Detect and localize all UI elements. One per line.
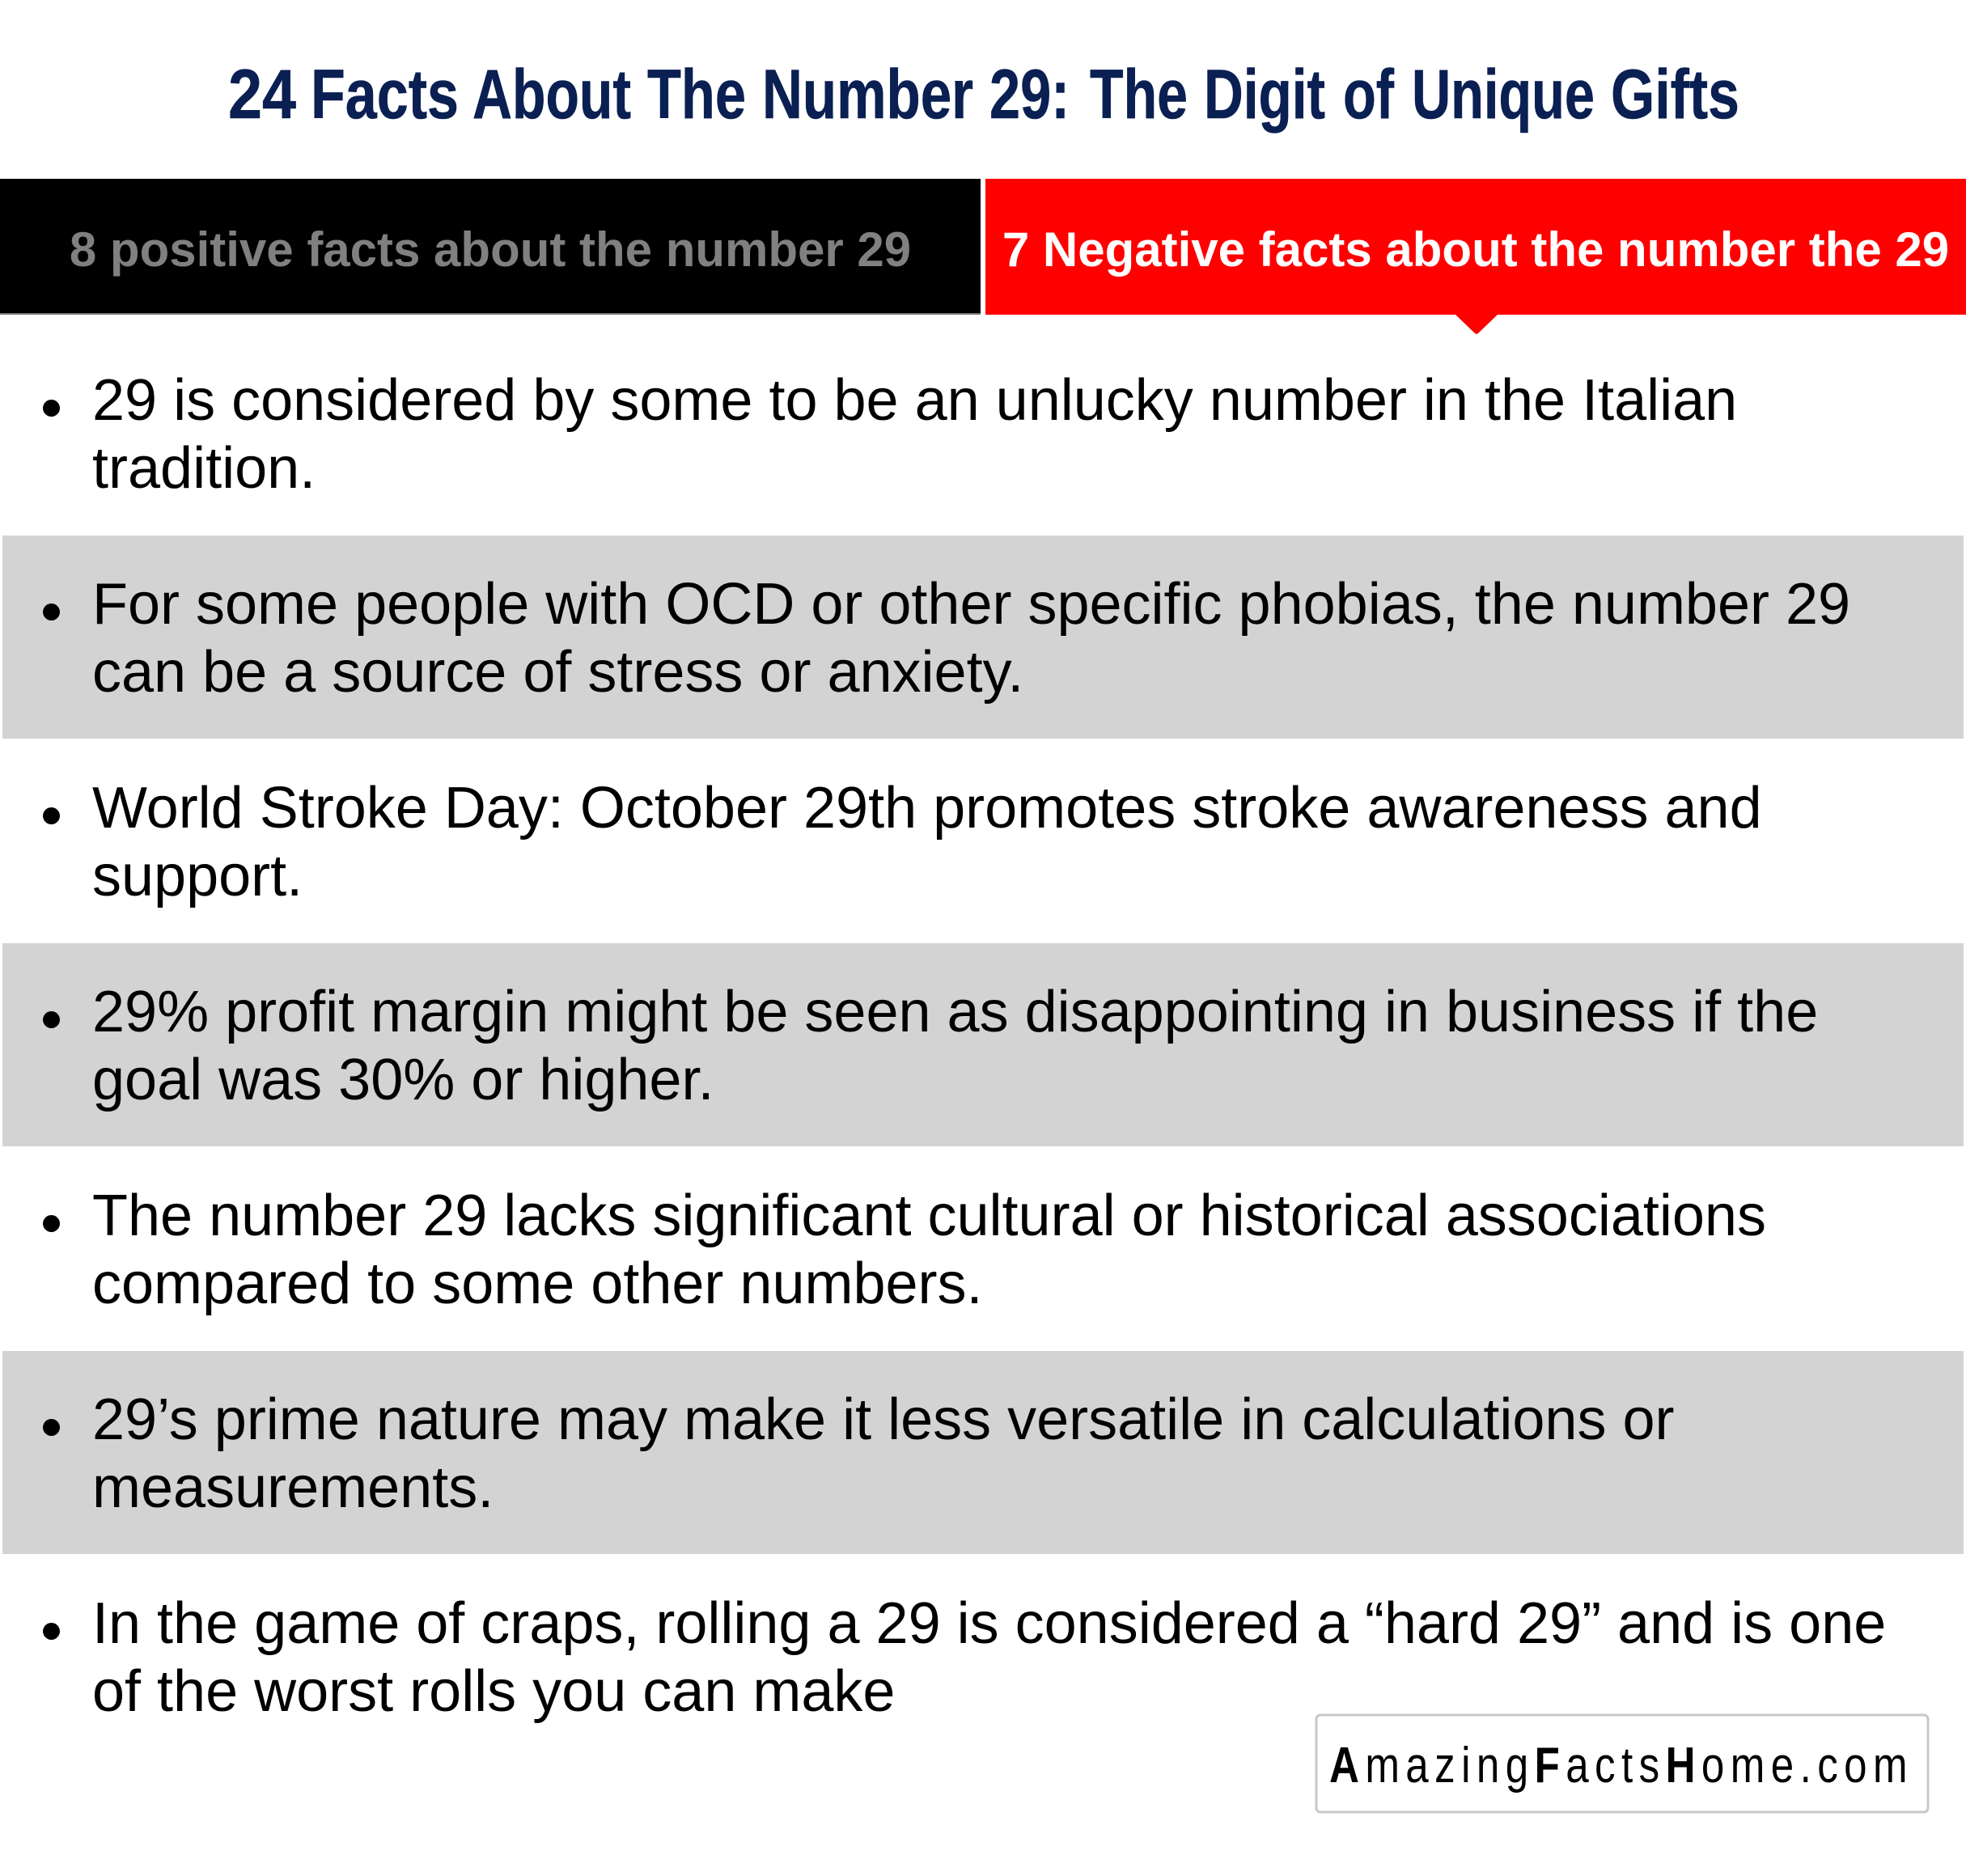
title: The (647, 56, 746, 133)
bullet (43, 400, 60, 417)
fact text: goal was 30% or higher. (92, 1048, 714, 1112)
fact row 1 (43, 368, 1737, 501)
fact row 4 (2, 943, 1964, 1146)
fact row 2 (2, 536, 1964, 739)
icon: active tab pointer (1455, 315, 1498, 334)
fact text: 29% profit margin might be seen as disappointing in business if the (92, 980, 1818, 1044)
title: Unique (1412, 56, 1595, 133)
bullet (43, 1011, 60, 1028)
tab label: positive: 8 positive facts about the number 29 (70, 222, 911, 277)
fact row 7 (43, 1591, 1886, 1724)
watermark badge (1316, 1713, 1929, 1814)
fact text (92, 572, 1850, 705)
fact text: World Stroke Day: October 29th promotes stroke awareness and (92, 776, 1762, 841)
title: of (1343, 56, 1394, 133)
fact text (92, 1387, 1675, 1520)
fact text: In the game of craps, rolling a 29 is considered a “hard 29” and is one (92, 1591, 1886, 1656)
title: 24 (228, 56, 296, 133)
title (228, 56, 1739, 133)
tab: negative facts (985, 179, 1966, 315)
bullet (43, 1419, 60, 1436)
fact text (92, 776, 1762, 908)
bullet (43, 1623, 60, 1640)
fact row 5 (43, 1184, 1766, 1316)
title: About (472, 56, 631, 133)
title: Gifts (1611, 56, 1739, 133)
fact text: can be a source of stress or anxiety. (92, 640, 1023, 705)
bullet (43, 603, 60, 620)
fact text: tradition. (92, 436, 316, 501)
tab: positive facts (0, 179, 981, 315)
fact text: For some people with OCD or other specific phobias, the number 29 (92, 572, 1850, 637)
bullet (43, 1215, 60, 1232)
title: Facts (311, 56, 459, 133)
fact text (92, 368, 1737, 501)
fact text: compared to some other numbers. (92, 1251, 983, 1316)
fact text (92, 980, 1818, 1112)
tab label: negative: 7 Negative facts about the number the 29 (1002, 222, 1949, 277)
fact text: support. (92, 844, 303, 908)
title: The (1090, 56, 1188, 133)
fact text: of the worst rolls you can make (92, 1659, 895, 1724)
fact text (92, 1591, 1886, 1724)
fact text: 29 is considered by some to be an unlucky number in the Italian (92, 368, 1737, 433)
title: Digit (1204, 56, 1325, 133)
title: 29: (989, 56, 1070, 133)
fact row 6 (2, 1351, 1964, 1554)
fact row 3 (43, 776, 1762, 908)
fact text (92, 1184, 1766, 1316)
fact text: The number 29 lacks significant cultural or historical associations (92, 1184, 1766, 1248)
fact text: measurements. (92, 1455, 494, 1520)
title: Number (762, 56, 973, 133)
bullet (43, 807, 60, 824)
fact text: 29’s prime nature may make it less versatile in calculations or (92, 1387, 1675, 1452)
